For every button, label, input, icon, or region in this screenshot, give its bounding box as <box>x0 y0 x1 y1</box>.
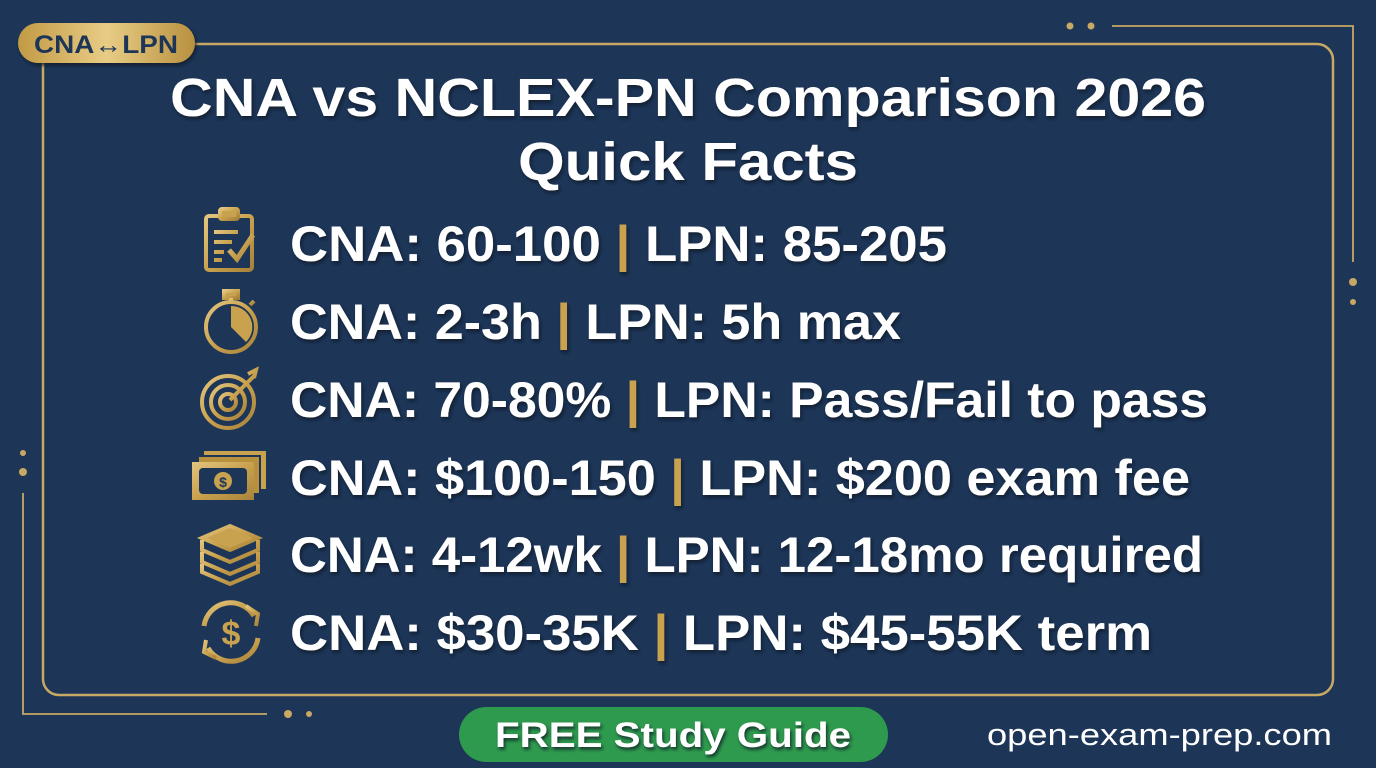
footer url: open-exam-prep.com <box>987 717 1332 752</box>
badge: CNA↔LPN <box>18 23 195 63</box>
row: fee: CNA: $100-150 | LPN: $200 exam fee <box>290 450 1190 507</box>
row: questions: CNA: 60-100 | LPN: 85-205 <box>290 216 947 273</box>
title: CNA vs NCLEX-PN Comparison 2026 <box>170 68 1206 128</box>
row: training: CNA: 4-12wk | LPN: 12-18mo required <box>290 527 1203 584</box>
title <box>170 68 1206 192</box>
icon: clipboard <box>206 209 253 270</box>
row: time: CNA: 2-3h | LPN: 5h max <box>290 294 901 351</box>
icon: money: $ <box>219 474 227 490</box>
icon: money <box>192 451 266 500</box>
icon: dollar cycle <box>204 603 258 661</box>
row: passing: CNA: 70-80% | LPN: Pass/Fail to pass <box>290 372 1208 429</box>
icon: target <box>202 370 256 428</box>
icon: stopwatch <box>206 291 256 352</box>
footer button: FREE Study Guide: FREE Study Guide <box>495 716 851 755</box>
icon: dollar cycle: $ <box>222 615 241 653</box>
title: Quick Facts <box>518 132 858 192</box>
icon: books <box>202 526 258 584</box>
badge: CNA↔LPN: CNA↔LPN <box>34 31 178 59</box>
footer button: FREE Study Guide <box>459 707 888 762</box>
row: salary: CNA: $30-35K | LPN: $45-55K term <box>290 605 1152 662</box>
fact rows <box>290 216 1208 662</box>
